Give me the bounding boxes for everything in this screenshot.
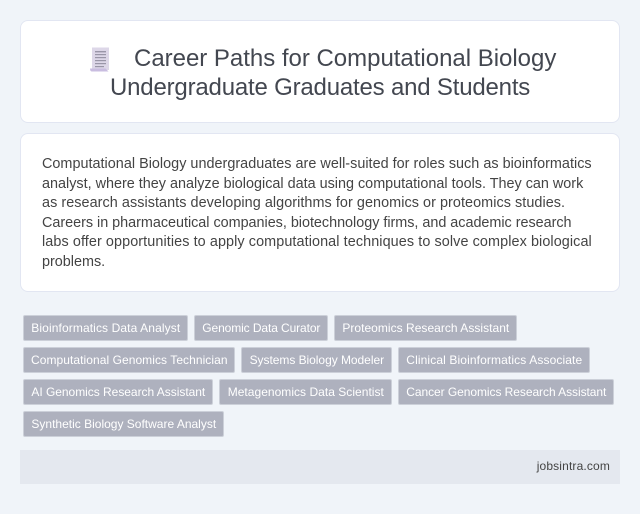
- description text: Computational Biology undergraduates are well-suited for roles such as bioinformatics: [42, 156, 592, 172]
- title: Career Paths for Computational Biology: [134, 45, 556, 72]
- icon: document scroll: [90, 48, 109, 72]
- tag: [23, 347, 235, 373]
- tag: [23, 411, 224, 437]
- tag: Bioinformatics Data Analyst: [31, 321, 180, 335]
- tag: [219, 379, 392, 405]
- tag: Proteomics Research Assistant: [342, 321, 509, 335]
- title: [110, 45, 556, 101]
- tag: Clinical Bioinformatics Associate: [406, 353, 582, 367]
- tag: Cancer Genomics Research Assistant: [406, 385, 606, 399]
- tag: Metagenomics Data Scientist: [228, 385, 384, 399]
- title: Undergraduate Graduates and Students: [110, 74, 530, 101]
- description text: Careers in pharmaceutical companies, biotechnology firms, and academic research: [42, 214, 572, 230]
- job tags: [23, 315, 614, 437]
- tag: Synthetic Biology Software Analyst: [31, 417, 216, 431]
- tag: AI Genomics Research Assistant: [31, 385, 205, 399]
- tag: [23, 315, 188, 341]
- tag: Computational Genomics Technician: [31, 353, 228, 367]
- description text: as research assistants developing algorithms for genomics or proteomics studies.: [42, 195, 565, 211]
- tag: [334, 315, 517, 341]
- tag: [23, 379, 213, 405]
- footer bar: [20, 450, 620, 484]
- tag: Systems Biology Modeler: [250, 353, 384, 367]
- footer source: jobsintra.com: [537, 459, 610, 473]
- description text: problems.: [42, 254, 105, 270]
- tag: Genomic Data Curator: [202, 321, 320, 335]
- tag: [398, 347, 590, 373]
- tag: [398, 379, 614, 405]
- tag: [241, 347, 392, 373]
- description text: analyst, where they analyze biological data using computational tools. They can work: [42, 176, 583, 192]
- tag: [194, 315, 328, 341]
- panel: description: [20, 133, 620, 292]
- description text: labs offer opportunities to apply computational techniques to solve complex biological: [42, 234, 592, 250]
- panel: title header: [20, 20, 620, 123]
- description text: [42, 156, 592, 270]
